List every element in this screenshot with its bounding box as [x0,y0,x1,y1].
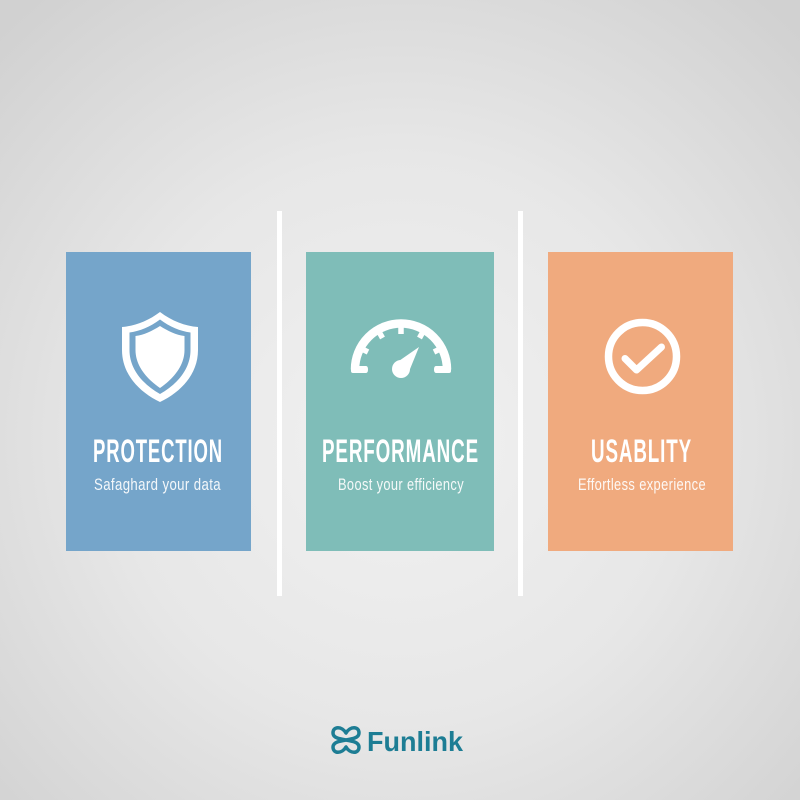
divider: right [518,211,523,596]
subtitle: protection: Safaghard your data [94,475,221,494]
card background: teal [306,252,494,551]
icon: check circle [608,322,676,390]
logo: funlink [333,726,463,757]
divider: left [277,211,282,596]
subtitle: performance: Boost your efficiency [338,475,464,494]
wordmark: Funlink [367,726,463,757]
icon: speedometer gauge [351,322,451,378]
heading: performance: PERFORMANCE [322,433,479,469]
card background: blue [66,252,251,551]
card background: orange [548,252,733,551]
icon: shield [122,312,198,402]
panel: usability [548,252,733,551]
heading: protection: PROTECTION [93,433,223,469]
panel: protection [66,252,251,551]
panel: performance [306,252,494,551]
heading: usability: USABLITY [591,433,692,469]
icon: knot logo mark [333,728,359,752]
subtitle: usability: Effortless experience [578,475,706,494]
